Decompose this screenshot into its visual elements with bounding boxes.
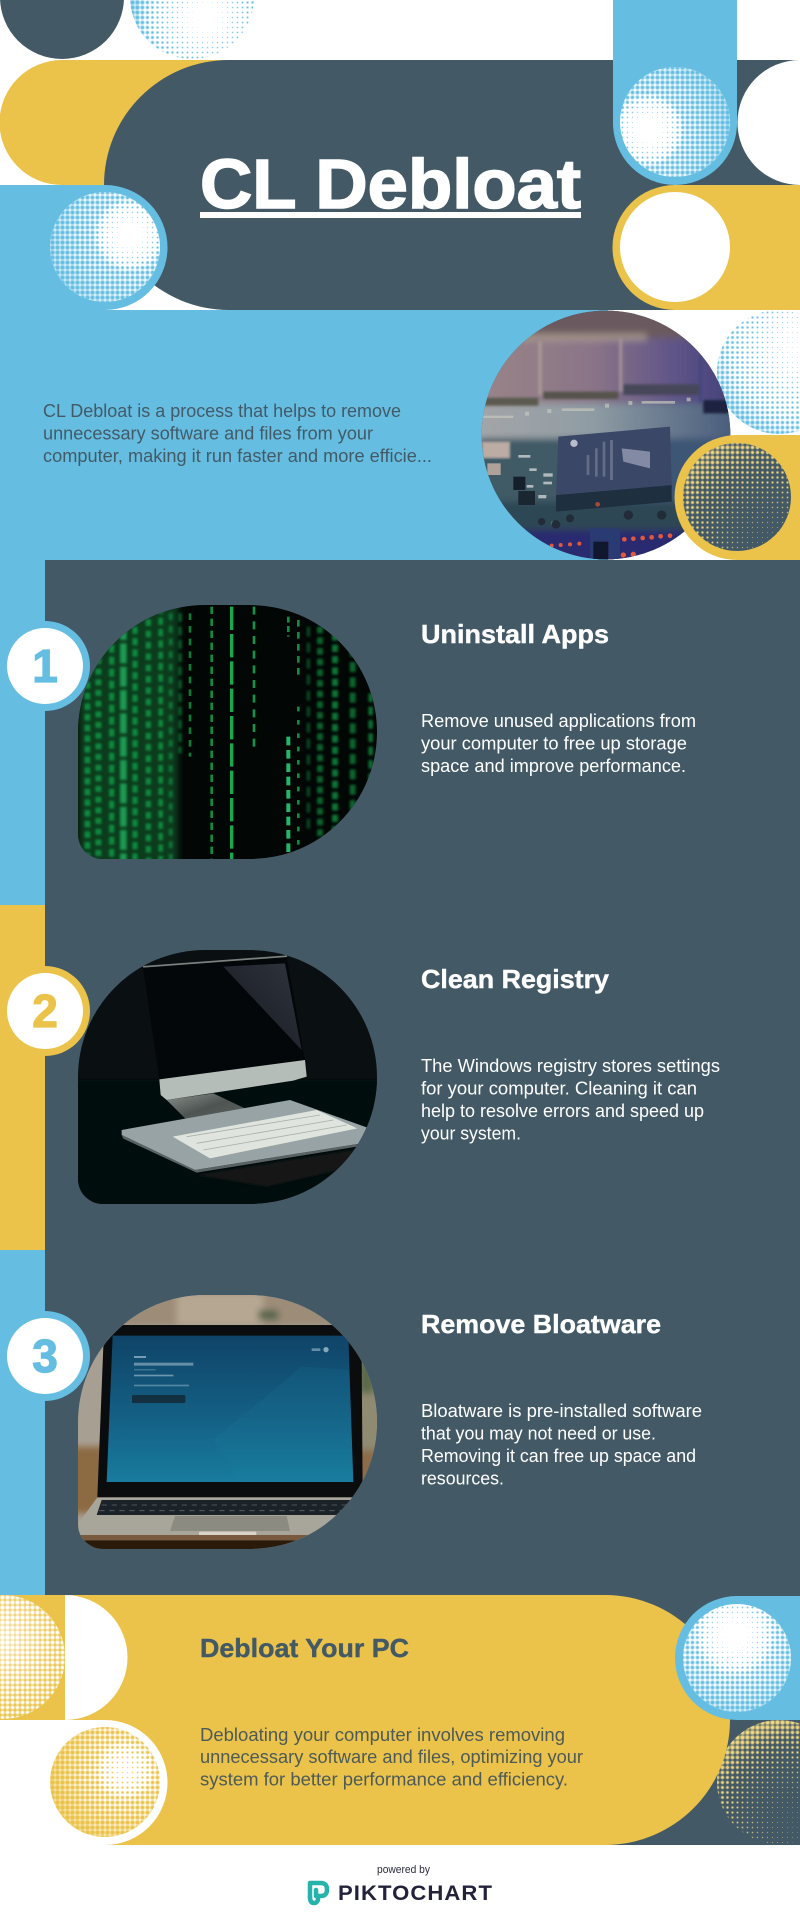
step 1 text: Remove unused applications from [421, 711, 696, 731]
photo: green code rain [78, 605, 377, 859]
number badge 2 [0, 966, 90, 1056]
footer heading: Debloat Your PC [200, 1633, 409, 1663]
left strip: yellow 2 [0, 905, 45, 1250]
title: CL Debloat [200, 145, 581, 223]
number badge 3 [0, 1311, 90, 1401]
halftone: intro right [717, 310, 800, 435]
step 2 text: help to resolve errors and speed up [421, 1101, 704, 1121]
header dark band [104, 60, 800, 310]
intro paragraph: computer, making it run faster and more efficie... [43, 446, 432, 466]
logo icon [310, 1883, 327, 1903]
footer text: unnecessary software and files, optimizing your [200, 1747, 583, 1767]
step 1 text [421, 711, 696, 776]
intro paragraph: unnecessary software and files from your [43, 424, 373, 444]
step 1 text: your computer to free up storage [421, 734, 687, 754]
intro paragraph [43, 401, 432, 466]
main dark panel [45, 560, 800, 1595]
footer halftone: lower right [717, 1720, 800, 1845]
intro yellow pill with halftone [675, 435, 800, 560]
photo: laptop [78, 1295, 377, 1549]
photo: desktop computer [78, 950, 377, 1204]
left strip: blue 1 [0, 560, 45, 905]
footer left yellow square with halftone [0, 1595, 65, 1720]
footer white half circle [65, 1595, 128, 1720]
step 3 text [421, 1401, 702, 1488]
step 3 text: Bloatware is pre-installed software [421, 1401, 702, 1421]
footer text [200, 1725, 583, 1790]
header white half circle [738, 60, 800, 185]
footer text: Debloating your computer involves removing [200, 1725, 565, 1745]
left strip: blue 3 [0, 1250, 45, 1595]
step 1 text: space and improve performance. [421, 756, 686, 776]
footer text: system for better performance and efficiency. [200, 1770, 568, 1790]
number badge 1: 1 [32, 640, 58, 692]
step 2 text: The Windows registry stores settings [421, 1056, 720, 1076]
footer blue pill with halftone [675, 1596, 800, 1720]
number badge 3: 3 [32, 1330, 58, 1382]
step 3 heading: Remove Bloatware [421, 1309, 661, 1339]
intro paragraph: CL Debloat is a process that helps to remove [43, 401, 401, 421]
step 2 heading: Clean Registry [421, 964, 610, 994]
logo wordmark: PIKTOCHART [338, 1882, 493, 1905]
footer yellow panel [65, 1595, 730, 1845]
header circle: dark [0, 0, 124, 59]
step 2 text: for your computer. Cleaning it can [421, 1078, 697, 1098]
step 2 text [421, 1056, 720, 1144]
step 3 text: resources. [421, 1468, 504, 1488]
step 3 text: that you may not need or use. [421, 1424, 656, 1444]
step 2 text: your system. [421, 1124, 521, 1144]
header yellow pill [0, 60, 260, 185]
step 1 heading: Uninstall Apps [421, 619, 609, 649]
halftone: top circle [130, 0, 255, 60]
header blue pill with halftone [0, 185, 168, 310]
powered by: powered by [377, 1864, 430, 1876]
intro blue panel [0, 310, 608, 560]
number badge 2: 2 [32, 985, 58, 1037]
photo: circuit board [482, 310, 730, 560]
footer dark right block [600, 1595, 800, 1845]
footer white pill with halftone [50, 1720, 168, 1845]
step 3 text: Removing it can free up space and [421, 1446, 696, 1466]
header yellow pill with white circle [612, 185, 800, 310]
header blue tab with halftone [613, 0, 737, 185]
number badge 1 [0, 621, 90, 711]
